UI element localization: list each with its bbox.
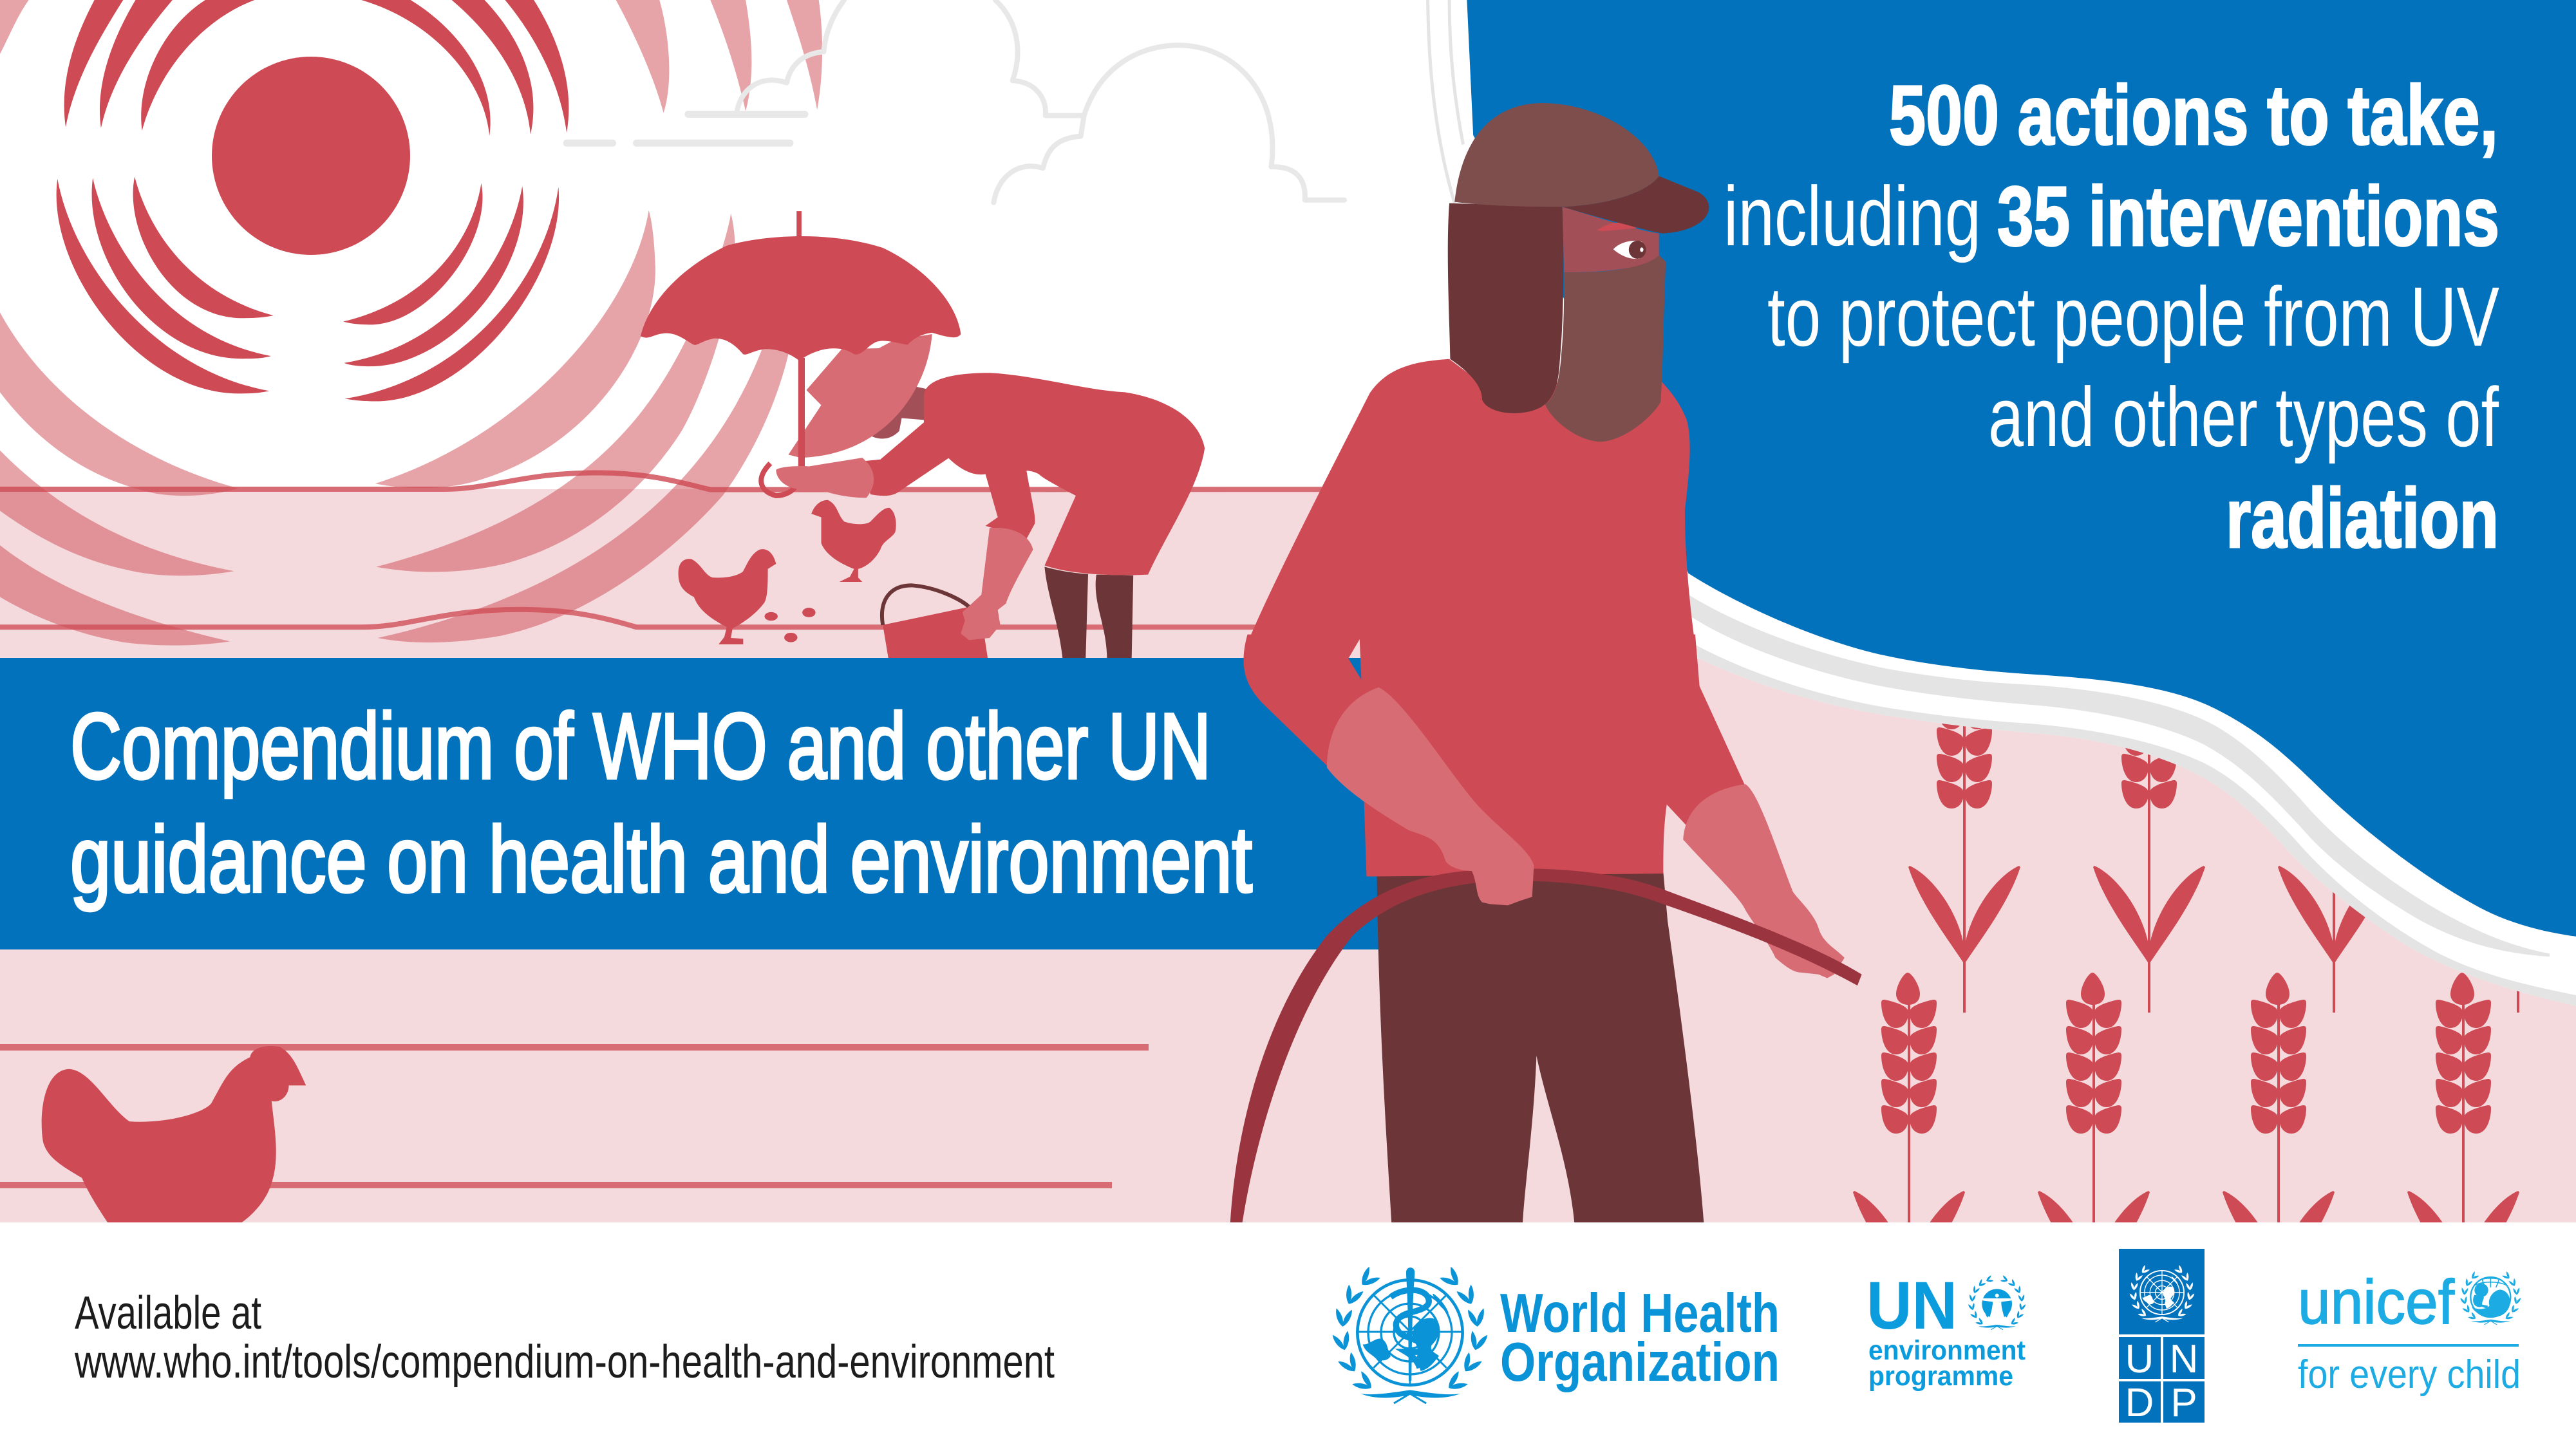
body bbox=[862, 373, 1205, 575]
logo: UNDP: N bbox=[2170, 1337, 2198, 1381]
man with hose bbox=[1230, 103, 1862, 1223]
logo: World Health Organization: Organization bbox=[1500, 1332, 1780, 1393]
title bbox=[70, 694, 1252, 911]
sun rings bbox=[57, 0, 569, 401]
title: Compendium of WHO and other UN bbox=[70, 694, 1211, 798]
sun bbox=[57, 0, 569, 401]
woman legs bbox=[1044, 567, 1133, 659]
logo: World Health Organization bbox=[1330, 1264, 1780, 1403]
logo: unicef: for every child bbox=[2298, 1352, 2521, 1397]
hose bbox=[1230, 868, 1862, 1223]
woman with umbrella, chickens and bucket bbox=[641, 211, 1205, 659]
headline: actions bbox=[1724, 68, 2499, 565]
chicken bbox=[811, 500, 896, 582]
logo: UNDP bbox=[2119, 1249, 2205, 1425]
man torso lower, pants, gloves, hose bbox=[1230, 635, 1862, 1223]
umbrella bbox=[641, 211, 961, 496]
left glove bbox=[1327, 687, 1534, 905]
eye bbox=[1613, 241, 1646, 259]
WHO emblem bbox=[1330, 1264, 1490, 1403]
pants bbox=[1377, 872, 1704, 1223]
cheek mark bbox=[1597, 223, 1637, 231]
UN environment emblem bbox=[1968, 1275, 2027, 1330]
logo: World Health Organization: World Health bbox=[1500, 1283, 1780, 1344]
cap bbox=[1454, 103, 1659, 207]
wave bands and blue panel bbox=[1467, 0, 2576, 1006]
field lines bbox=[0, 473, 1560, 627]
unicef emblem bbox=[2459, 1271, 2522, 1325]
logo: UN environment programme: environment bbox=[1868, 1335, 2026, 1366]
headline: actions: radiation bbox=[2226, 471, 2499, 565]
pink ground bbox=[0, 489, 2576, 1223]
logo: UNDP: P bbox=[2170, 1381, 2197, 1425]
headline: actions: including bbox=[1724, 169, 1981, 263]
right glove bbox=[1683, 784, 1845, 978]
pale sun rays bbox=[0, 0, 822, 646]
woman lower glove bbox=[961, 528, 1033, 640]
lower field lines bbox=[0, 1044, 1149, 1188]
title: guidance on health and environment bbox=[70, 807, 1252, 911]
logo: UNDP: D bbox=[2125, 1381, 2154, 1425]
cap brim bbox=[1563, 176, 1709, 234]
blue panel bbox=[1467, 0, 2576, 937]
hood bbox=[1448, 203, 1563, 413]
man head with hat and mask bbox=[1448, 103, 1709, 442]
face mask bbox=[1545, 255, 1666, 442]
wheat field bbox=[1853, 648, 2574, 1338]
availability text bbox=[74, 1287, 1055, 1388]
logo: unicef bbox=[2298, 1267, 2522, 1397]
availability text: Available at bbox=[75, 1287, 261, 1339]
neck bbox=[867, 386, 932, 438]
torso bbox=[1243, 635, 1745, 877]
man torso upper bbox=[1249, 359, 1695, 639]
blue title band bbox=[0, 658, 1416, 949]
chicken bbox=[679, 549, 776, 644]
clouds bbox=[567, 0, 1344, 203]
availability text: www.who.int/tools/compendium-on-health-and-environment bbox=[74, 1336, 1055, 1388]
UN emblem bbox=[2129, 1264, 2195, 1322]
logo: UN environment programme bbox=[1866, 1268, 2027, 1392]
headscarf bbox=[788, 334, 932, 458]
woman glove holding umbrella bbox=[776, 458, 874, 498]
bucket bbox=[882, 585, 988, 659]
thin grey stripes bbox=[1428, 0, 1463, 203]
chicken feed bbox=[764, 608, 816, 642]
logo: UNDP: U bbox=[2125, 1337, 2154, 1381]
face bbox=[1563, 207, 1659, 272]
logo: unicef: unicef bbox=[2298, 1267, 2455, 1337]
big chicken bbox=[42, 1046, 306, 1222]
logo: UN environment programme: UN bbox=[1866, 1268, 1957, 1343]
footer bbox=[0, 1222, 2576, 1449]
logo: UN environment programme: programme bbox=[1868, 1361, 2013, 1392]
